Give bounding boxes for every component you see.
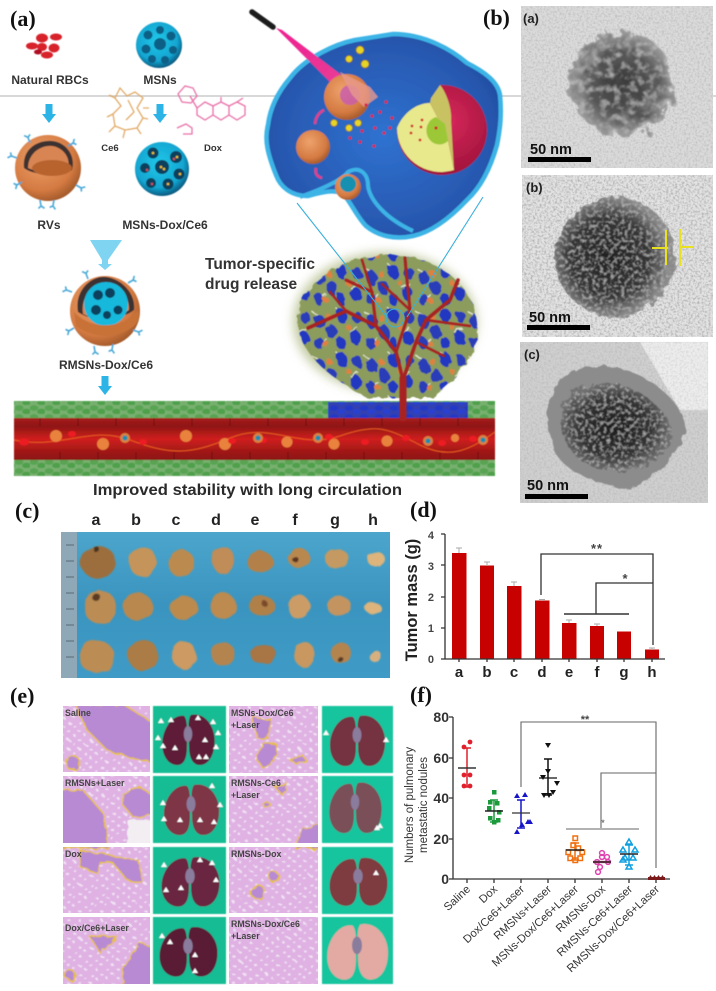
x category labels: RMSNs-Dox — [554, 883, 608, 935]
single star f: * — [601, 818, 605, 828]
panel f heading: (f) — [410, 682, 432, 707]
x category letters — [455, 664, 657, 681]
panel c heading: (c) — [15, 498, 39, 523]
TEM image a: 50 nm — [530, 142, 572, 158]
histology labels: MSNs-Dox/Ce6 — [231, 708, 294, 718]
x category letters: h — [647, 664, 657, 681]
x category labels — [442, 883, 662, 975]
y tick labels: 2 — [428, 592, 434, 604]
panel b: TEM micrographs — [483, 5, 713, 503]
histology labels: RMSNs-Ce6 — [231, 778, 281, 788]
error bars — [456, 548, 655, 650]
TEM image c: 50 nm — [527, 478, 569, 494]
label: RVs: RVs — [37, 218, 61, 232]
tumor cell with laser-triggered release — [252, 12, 501, 238]
group letters: d — [211, 512, 221, 529]
y tick labels — [433, 709, 449, 887]
y tick labels — [428, 530, 435, 666]
bars — [452, 553, 659, 659]
label: improved stability: Improved stability with long circulation — [93, 482, 402, 499]
panel b heading: (b) — [483, 5, 510, 30]
histology labels: +Laser — [231, 931, 260, 941]
label: MSNs: MSNs — [143, 73, 177, 87]
TEM image a — [521, 6, 713, 168]
x category letters: g — [619, 664, 629, 681]
panel a heading: (a) — [10, 6, 36, 31]
series: RMSNs+Laser — [539, 743, 560, 798]
series: Dox — [485, 790, 503, 824]
arrow: MSNs to loaded MSNs — [153, 104, 167, 123]
x category labels: Dox/Ce6+Laser — [461, 883, 527, 946]
intact vesicle — [296, 130, 330, 164]
histology labels: Dox — [65, 849, 82, 859]
icon: drug-loaded MSN sphere — [135, 142, 189, 196]
y tick labels: 40 — [433, 790, 449, 806]
ruptured particle — [324, 72, 378, 120]
significance brackets — [541, 554, 653, 645]
histology labels: Saline — [65, 708, 91, 718]
icon: natural red blood cells — [26, 34, 62, 58]
x category letters: e — [565, 664, 573, 681]
single star: * — [622, 571, 628, 586]
photo background — [61, 532, 390, 678]
y axis title: metastatic nodules — [418, 757, 430, 853]
group letters: g — [330, 512, 340, 529]
panel d: tumor mass bar chart — [403, 497, 665, 681]
group letters: a — [92, 512, 101, 529]
series: Dox/Ce6+Laser — [512, 792, 533, 834]
x category letters: d — [537, 664, 547, 681]
x category labels: MSNs-Dox/Ce6+Laser — [490, 883, 581, 969]
laser device — [252, 12, 273, 27]
x category letters: a — [455, 664, 464, 681]
label: Dox: Dox — [204, 143, 223, 154]
histology labels: RMSNs+Laser — [65, 778, 125, 788]
y axis title — [404, 747, 430, 863]
double star: ** — [591, 541, 603, 556]
y tick labels: 80 — [433, 709, 449, 725]
y tick labels: 1 — [428, 623, 434, 635]
series: RMSNs-Ce6+Laser — [620, 839, 638, 869]
panel e: lung histology and photographs — [10, 683, 393, 990]
tumor tissue with vasculature — [293, 252, 478, 418]
cutaway nucleus sphere — [397, 85, 487, 175]
released ROS markers — [330, 46, 369, 132]
group letters — [92, 512, 378, 529]
y tick labels: 0 — [428, 654, 434, 666]
label: Ce6: Ce6 — [101, 143, 119, 154]
label: tumor-specific drug release: Tumor-specific — [205, 256, 315, 273]
lung photographs — [153, 706, 393, 984]
histology labels: RMSNs-Dox — [231, 849, 281, 859]
zoom lines from tumor to cell — [297, 197, 483, 327]
group letters: e — [251, 512, 260, 529]
group letters: f — [292, 512, 298, 529]
y tick labels: 60 — [433, 750, 449, 766]
separator line across upper panels — [0, 95, 716, 97]
arrow: funnel combining particles — [90, 240, 122, 270]
panel d heading: (d) — [410, 497, 437, 522]
histology labels: RMSNs-Dox/Ce6 — [231, 919, 300, 929]
histology labels: +Laser — [231, 720, 260, 730]
icon: red-cell vesicle RV — [8, 134, 85, 209]
icon: MSN sphere — [136, 22, 182, 68]
TEM image c — [520, 342, 708, 503]
blood vessel with circulating particles — [14, 401, 495, 476]
y axis title: Numbers of pulmonary — [404, 747, 416, 863]
series: RMSNs-Dox/Ce6+Laser — [648, 875, 665, 880]
histology images — [55, 700, 325, 990]
panel f: metastatic nodule scatter plot — [404, 682, 670, 975]
y tick labels: 3 — [428, 561, 434, 573]
series: MSNs-Dox/Ce6+Laser — [566, 836, 584, 862]
x category labels: RMSNs-Dox/Ce6+Laser — [565, 883, 662, 975]
x category labels: RMSNs+Laser — [492, 883, 554, 943]
TEM image c: (c) — [524, 347, 540, 362]
arrow: into blood vessel — [98, 376, 112, 395]
axes — [441, 534, 665, 662]
brackets — [521, 722, 656, 868]
x category labels: RMSNs-Ce6+Laser — [555, 883, 635, 959]
cell body — [266, 34, 501, 238]
label: RMSNs-Dox/Ce6: RMSNs-Dox/Ce6 — [59, 358, 153, 372]
panel a: nanoparticle schematic — [8, 6, 501, 499]
x category letters: c — [510, 664, 518, 681]
panel c: excised tumor photo — [15, 498, 390, 678]
group letters: b — [131, 512, 141, 529]
label: Natural RBCs: Natural RBCs — [11, 73, 89, 87]
axes — [449, 717, 670, 883]
TEM image b — [522, 175, 713, 337]
arrow: RBCs to RVs — [42, 104, 56, 123]
chemical structure: Dox — [177, 86, 245, 134]
panel e heading: (e) — [10, 683, 34, 708]
double star f: ** — [581, 714, 590, 726]
histology labels — [65, 708, 300, 941]
released drug dots — [348, 100, 394, 148]
histology labels: +Laser — [231, 790, 260, 800]
series: RMSNs-Dox — [593, 851, 611, 874]
y tick labels: 4 — [428, 530, 435, 542]
label: MSNs-Dox/Ce6: MSNs-Dox/Ce6 — [122, 218, 208, 232]
TEM image b: (b) — [526, 180, 543, 195]
chemical structure: Ce6 — [107, 88, 149, 138]
x category letters: f — [594, 664, 600, 681]
pink pathway arrows — [315, 110, 324, 178]
group letters: h — [368, 512, 378, 529]
y axis title: Tumor mass (g) — [403, 539, 421, 661]
group letters: c — [172, 512, 181, 529]
y tick labels: 20 — [433, 831, 449, 847]
icon: RMSNs-Dox/Ce6 composite particle — [63, 270, 142, 355]
label: second line: drug release — [205, 276, 298, 293]
y tick labels: 0 — [441, 871, 449, 887]
TEM image b: 50 nm — [529, 310, 571, 326]
tumor specimens — [79, 546, 385, 673]
TEM image a: (a) — [523, 11, 539, 26]
x category labels: Saline — [442, 883, 473, 914]
series: Saline — [458, 740, 476, 788]
endocytosed particle — [335, 174, 361, 200]
x category labels: Dox — [477, 883, 500, 906]
histology labels: Dox/Ce6+Laser — [65, 923, 129, 933]
x category letters: b — [482, 664, 492, 681]
laser beam — [276, 28, 348, 90]
ruler — [61, 532, 77, 678]
